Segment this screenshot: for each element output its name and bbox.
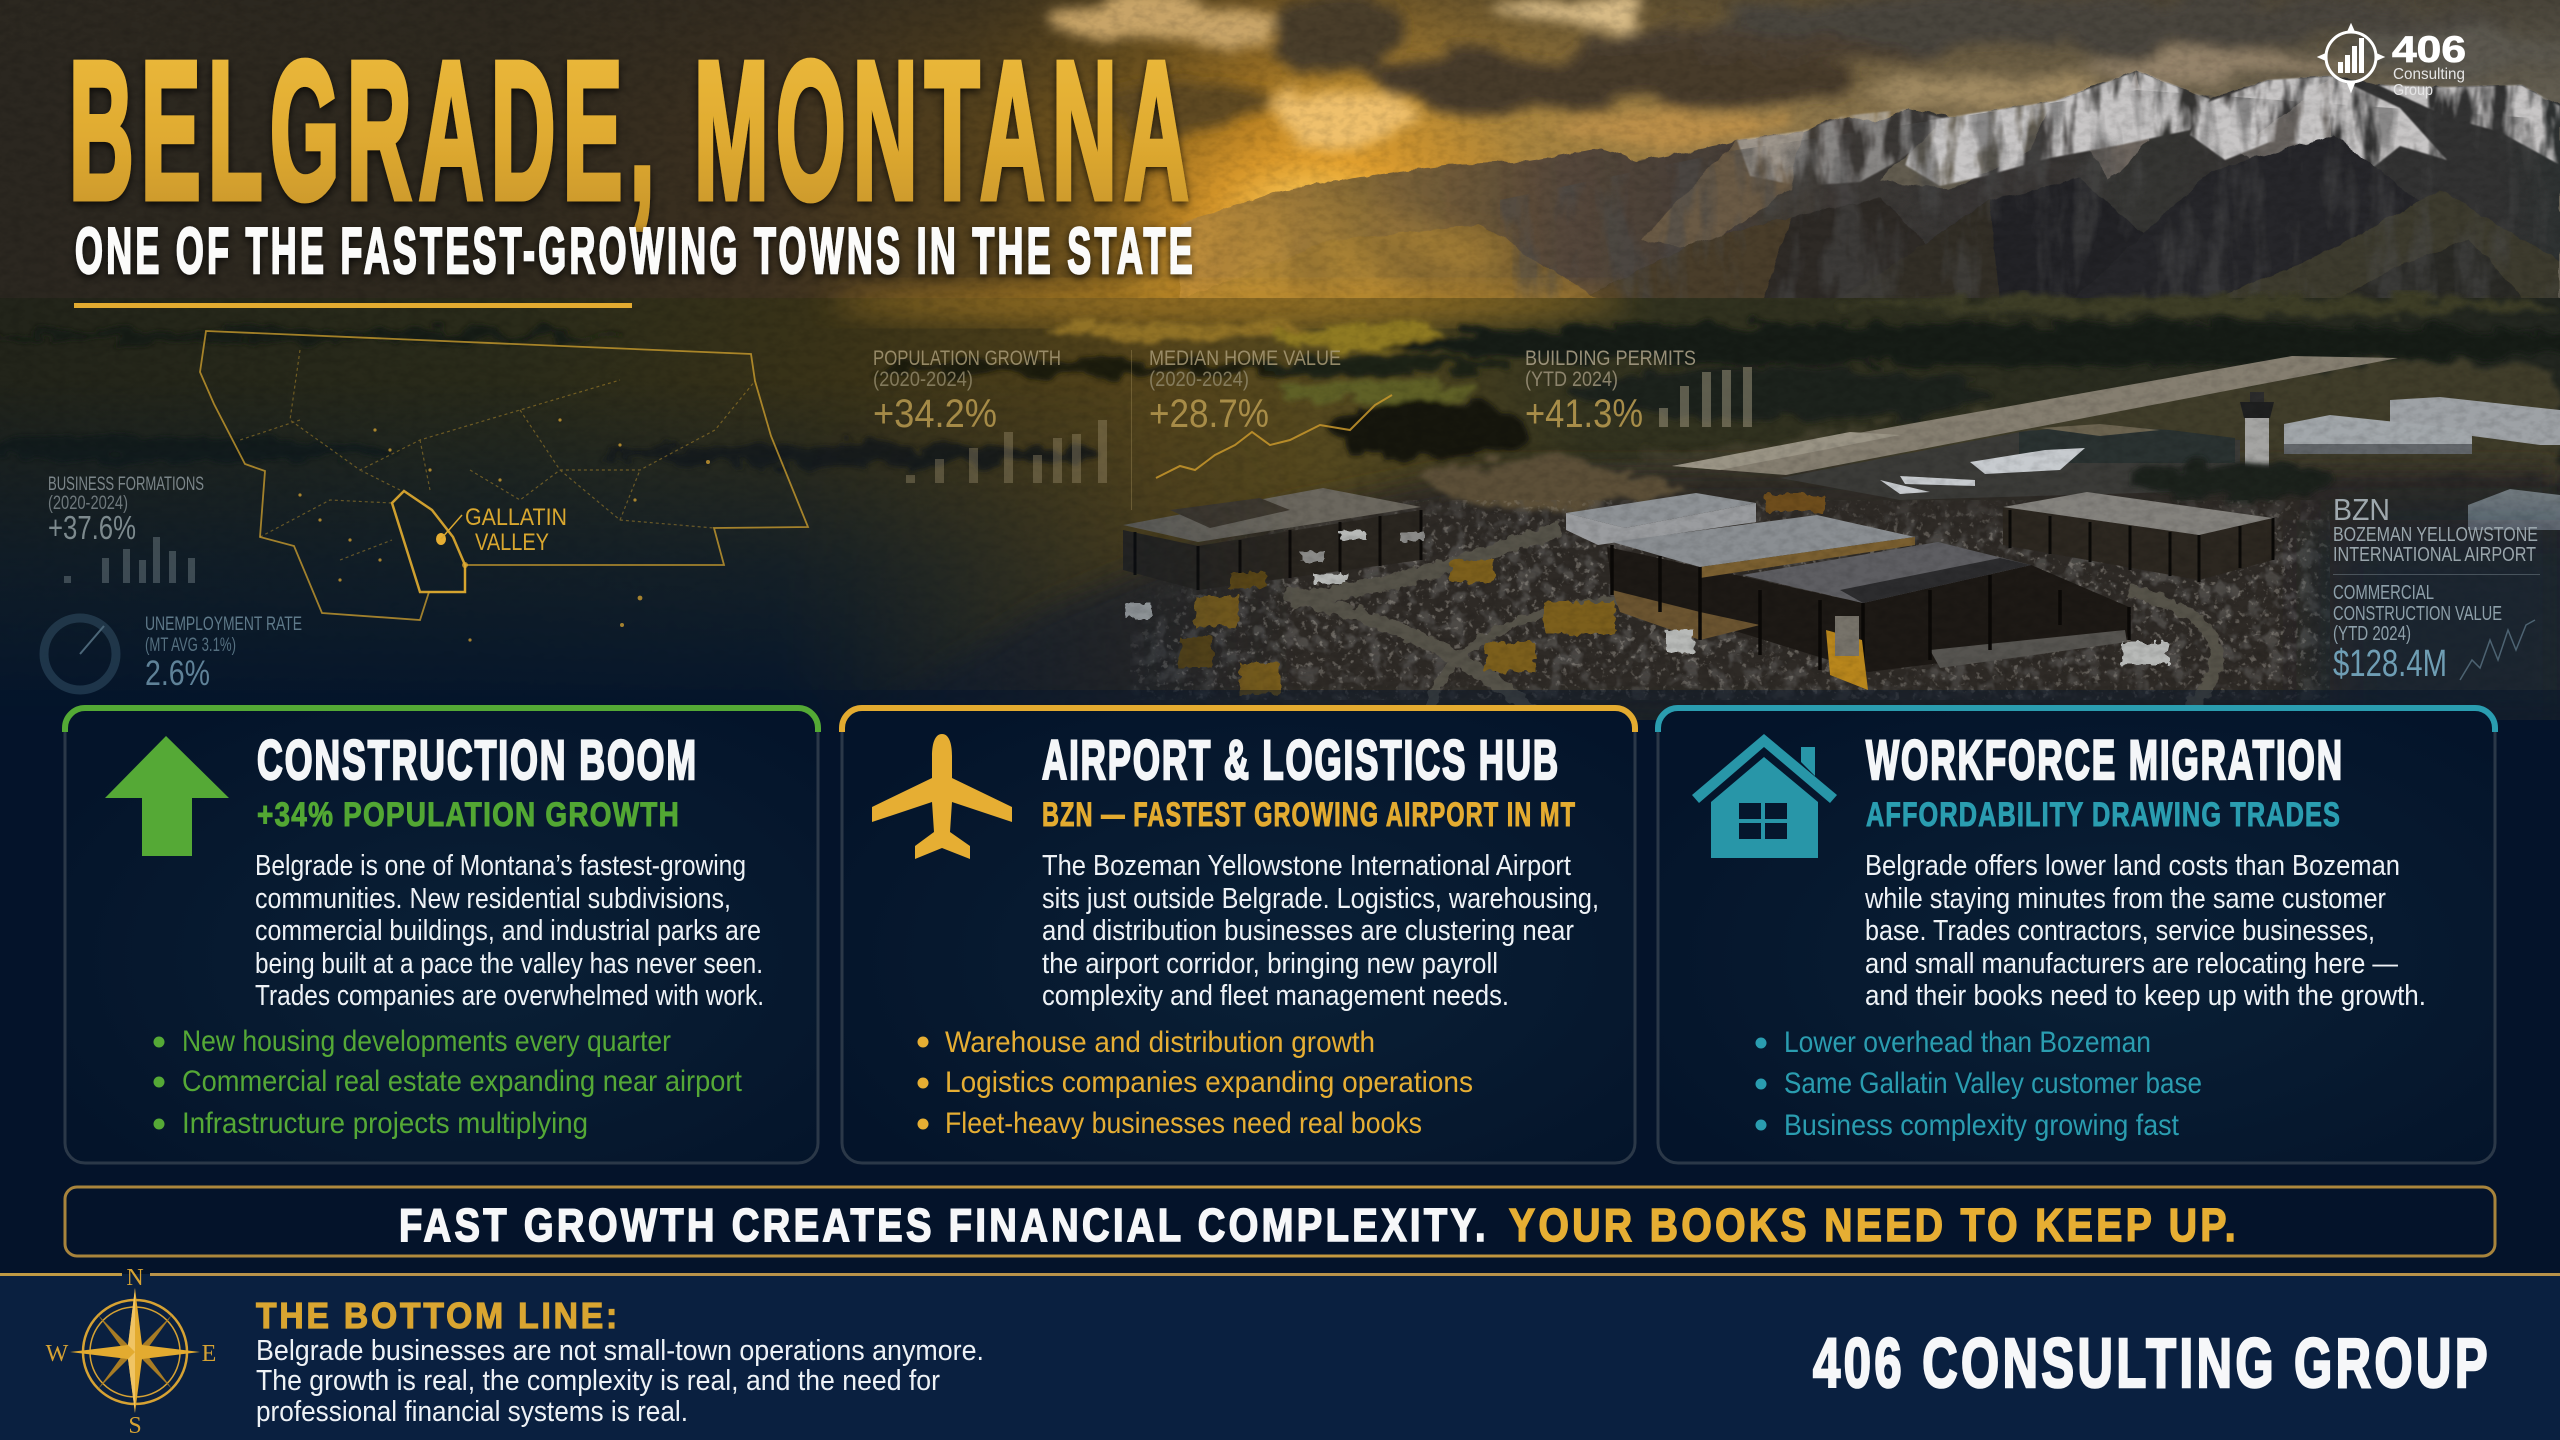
commercial label 3: (YTD 2024) (2333, 623, 2411, 645)
trucks (1126, 530, 2168, 664)
bullet list: Infrastructure projects multiplying (182, 1107, 588, 1140)
sparkline (2460, 620, 2535, 680)
shoulder far left (1180, 225, 1600, 300)
tan bare ground (1420, 460, 1700, 510)
compass letters: W (46, 1341, 69, 1367)
sky (0, 0, 2560, 298)
equipment (1180, 494, 1825, 694)
stat period: (MT AVG 3.1%) (145, 635, 236, 656)
subheading: +34% POPULATION GROWTH (257, 796, 680, 834)
bullet list (918, 1026, 1473, 1140)
panel: workforce migration (1658, 708, 2495, 1163)
stat period: (2020-2024) (1149, 368, 1249, 391)
snow streaks (1737, 71, 2560, 190)
body text: Belgrade is one of Montana’s fastest-growing (255, 850, 746, 882)
bullet list: Commercial real estate expanding near airport (182, 1065, 743, 1098)
stat label: MEDIAN HOME VALUE (1149, 347, 1341, 370)
front ridges (1186, 136, 2560, 298)
city light dots (298, 418, 710, 642)
bullet list (154, 1025, 743, 1140)
location pin (436, 515, 462, 545)
stat value: +41.3% (1525, 392, 1643, 436)
stat label: BUSINESS FORMATIONS (48, 474, 204, 495)
stat value: +37.6% (48, 509, 136, 546)
planes (1880, 448, 2085, 494)
stat label: BUILDING PERMITS (1525, 347, 1696, 370)
ground debris texture (1130, 500, 2330, 700)
roads (1286, 530, 2217, 720)
panel: airport and logistics hub (842, 708, 1635, 1163)
logo: 406 Consulting Group (2318, 24, 2466, 99)
speckle texture (0, 0, 2560, 720)
subheading: AFFORDABILITY DRAWING TRADES (1866, 796, 2341, 834)
stat: median home value (1149, 347, 1392, 478)
airfield grass (1500, 362, 2560, 480)
bullet list: Warehouse and distribution growth (945, 1026, 1375, 1059)
body text: sits just outside Belgrade. Logistics, warehousing, (1042, 883, 1599, 915)
stat value: +28.7% (1149, 392, 1269, 436)
bullet list (1756, 1026, 2202, 1142)
body text: communities. New residential subdivisions, (255, 883, 731, 915)
front ridge left (1685, 198, 1925, 298)
stat bars (1659, 367, 1752, 427)
upper sky darkening (728, 0, 2560, 102)
body text: commercial buildings, and industrial parks are (255, 915, 761, 947)
terminal (2019, 425, 2235, 463)
heading: CONSTRUCTION BOOM (257, 728, 698, 791)
body text: and distribution businesses are clustering near (1042, 915, 1574, 947)
callout banner (65, 1187, 2495, 1256)
BZN: BZN (2333, 492, 2390, 527)
airport and commercial stats (2333, 492, 2540, 685)
stat: population growth (873, 347, 1107, 483)
icon: airplane (872, 734, 1012, 859)
compass letters: N (126, 1265, 144, 1291)
body text: the airport corridor, bringing new payroll (1042, 948, 1498, 980)
mountain range (1178, 70, 2560, 298)
bullet list: Business complexity growing fast (1784, 1109, 2180, 1142)
back ridge (1178, 70, 2560, 298)
logo wordmark: 406 (2392, 29, 2466, 70)
stat period: (2020-2024) (48, 493, 128, 514)
front ridge right (2060, 135, 2560, 320)
bottom line text (256, 1335, 984, 1428)
body text: Trades companies are overwhelmed with work. (255, 980, 764, 1012)
body text: complexity and fleet management needs. (1042, 980, 1509, 1012)
apron (1780, 430, 2240, 500)
logo sub word 2: Group (2393, 82, 2433, 99)
sun rays (1110, 190, 1510, 300)
stat line chart (1156, 395, 1392, 478)
body text: and their books need to keep up with the growth. (1865, 980, 2426, 1012)
construction ground (860, 470, 2560, 720)
foothill strip (1840, 296, 2560, 316)
left navy fade (0, 380, 1300, 720)
runway (1672, 356, 2398, 475)
hero photo scene (0, 0, 2560, 740)
stat divider (1131, 350, 1132, 510)
stat label: POPULATION GROWTH (873, 347, 1061, 370)
stat period: (YTD 2024) (1525, 368, 1618, 391)
commercial label 1: COMMERCIAL (2333, 582, 2434, 604)
bottom line text: professional financial systems is real. (256, 1396, 688, 1428)
tree lines and fields (0, 321, 2560, 467)
body text: while staying minutes from the same customer (1864, 883, 2386, 915)
main construction building (1607, 515, 2129, 690)
subheading: BZN — FASTEST GROWING AIRPORT IN MT (1042, 796, 1576, 834)
state border (200, 331, 808, 620)
body text: Belgrade offers lower land costs than Bozeman (1865, 850, 2400, 882)
compass letters: S (128, 1413, 142, 1439)
bottom line heading: THE BOTTOM LINE: (256, 1295, 620, 1336)
bullet list: Same Gallatin Valley customer base (1784, 1067, 2202, 1100)
logo sub word: Consulting (2393, 66, 2465, 83)
left steel frame (1123, 488, 1421, 590)
subtitle: ONE OF THE FASTEST-GROWING TOWNS IN THE STATE (75, 214, 1196, 287)
compass letters (46, 1265, 216, 1439)
stat bars (64, 537, 195, 583)
commercial value: $128.4M (2333, 643, 2447, 685)
stat period: (2020-2024) (873, 368, 973, 391)
stat: business formations (48, 474, 204, 583)
map: Montana outline with Gallatin Valley (200, 331, 808, 642)
bullet list: Fleet-heavy businesses need real books (945, 1107, 1422, 1140)
stat bars (906, 420, 1107, 483)
body text: and small manufacturers are relocating here — (1865, 948, 2398, 980)
body text: The Bozeman Yellowstone International Airport (1042, 850, 1571, 882)
right data panel tint (2330, 520, 2560, 740)
sun glow (1092, 118, 1469, 278)
stat label: UNEMPLOYMENT RATE (145, 614, 302, 635)
right steel frame (2003, 492, 2273, 582)
heading: AIRPORT & LOGISTICS HUB (1042, 728, 1560, 791)
airport hangars (2284, 397, 2560, 530)
icon: house (1692, 734, 1837, 858)
bullet list: New housing developments every quarter (182, 1025, 671, 1058)
gauge (44, 618, 116, 690)
horizon glow (830, 285, 1630, 321)
bullet list: Logistics companies expanding operations (945, 1066, 1473, 1099)
rock rib texture (1500, 90, 2560, 320)
body text: being built at a pace the valley has never seen. (255, 948, 763, 980)
dark airport trees (2130, 462, 2330, 502)
map label Gallatin Valley: VALLEY (475, 529, 549, 556)
commercial label 2: CONSTRUCTION VALUE (2333, 603, 2502, 625)
map label Gallatin Valley (465, 504, 567, 556)
bullet list: Lower overhead than Bozeman (1784, 1026, 2151, 1059)
stat: building permits (1525, 347, 1752, 436)
bottom line text: The growth is real, the complexity is real, and the need for (256, 1365, 940, 1397)
compass rose (46, 1265, 216, 1439)
body text (255, 850, 764, 1012)
body text (1042, 850, 1599, 1012)
footer panel (0, 1265, 2560, 1440)
body text (1864, 850, 2426, 1012)
banner white text: FAST GROWTH CREATES FINANCIAL COMPLEXITY. (399, 1199, 1489, 1251)
county lines (240, 350, 755, 560)
lit lower slope (2180, 190, 2560, 322)
body text: base. Trades contractors, service businesses, (1865, 915, 2375, 947)
compass letters: E (202, 1341, 216, 1367)
front ridge centre (1820, 178, 2230, 312)
bottom edge fade (0, 690, 2560, 720)
lit rock faces (1640, 131, 1802, 250)
control tower (2240, 392, 2274, 481)
map label Gallatin Valley: GALLATIN (465, 504, 567, 531)
icon: up arrow (105, 736, 229, 856)
stat value: +34.2% (873, 392, 997, 436)
left field and valley floor (0, 298, 2560, 720)
logo compass mark (2318, 24, 2384, 92)
banner gold text: YOUR BOOKS NEED TO KEEP UP. (1509, 1199, 2239, 1251)
Gallatin county outline (392, 491, 465, 592)
title rule (74, 303, 632, 308)
panel: construction boom (65, 708, 818, 1163)
white building (1566, 493, 1756, 545)
stat: unemployment rate (44, 614, 302, 693)
bottom line text: Belgrade businesses are not small-town operations anymore. (256, 1335, 984, 1367)
clouds (1050, 0, 2560, 141)
stat value: 2.6% (145, 654, 210, 693)
infographic canvas: BELGRADE, MONTANA (69, 21, 1196, 240)
